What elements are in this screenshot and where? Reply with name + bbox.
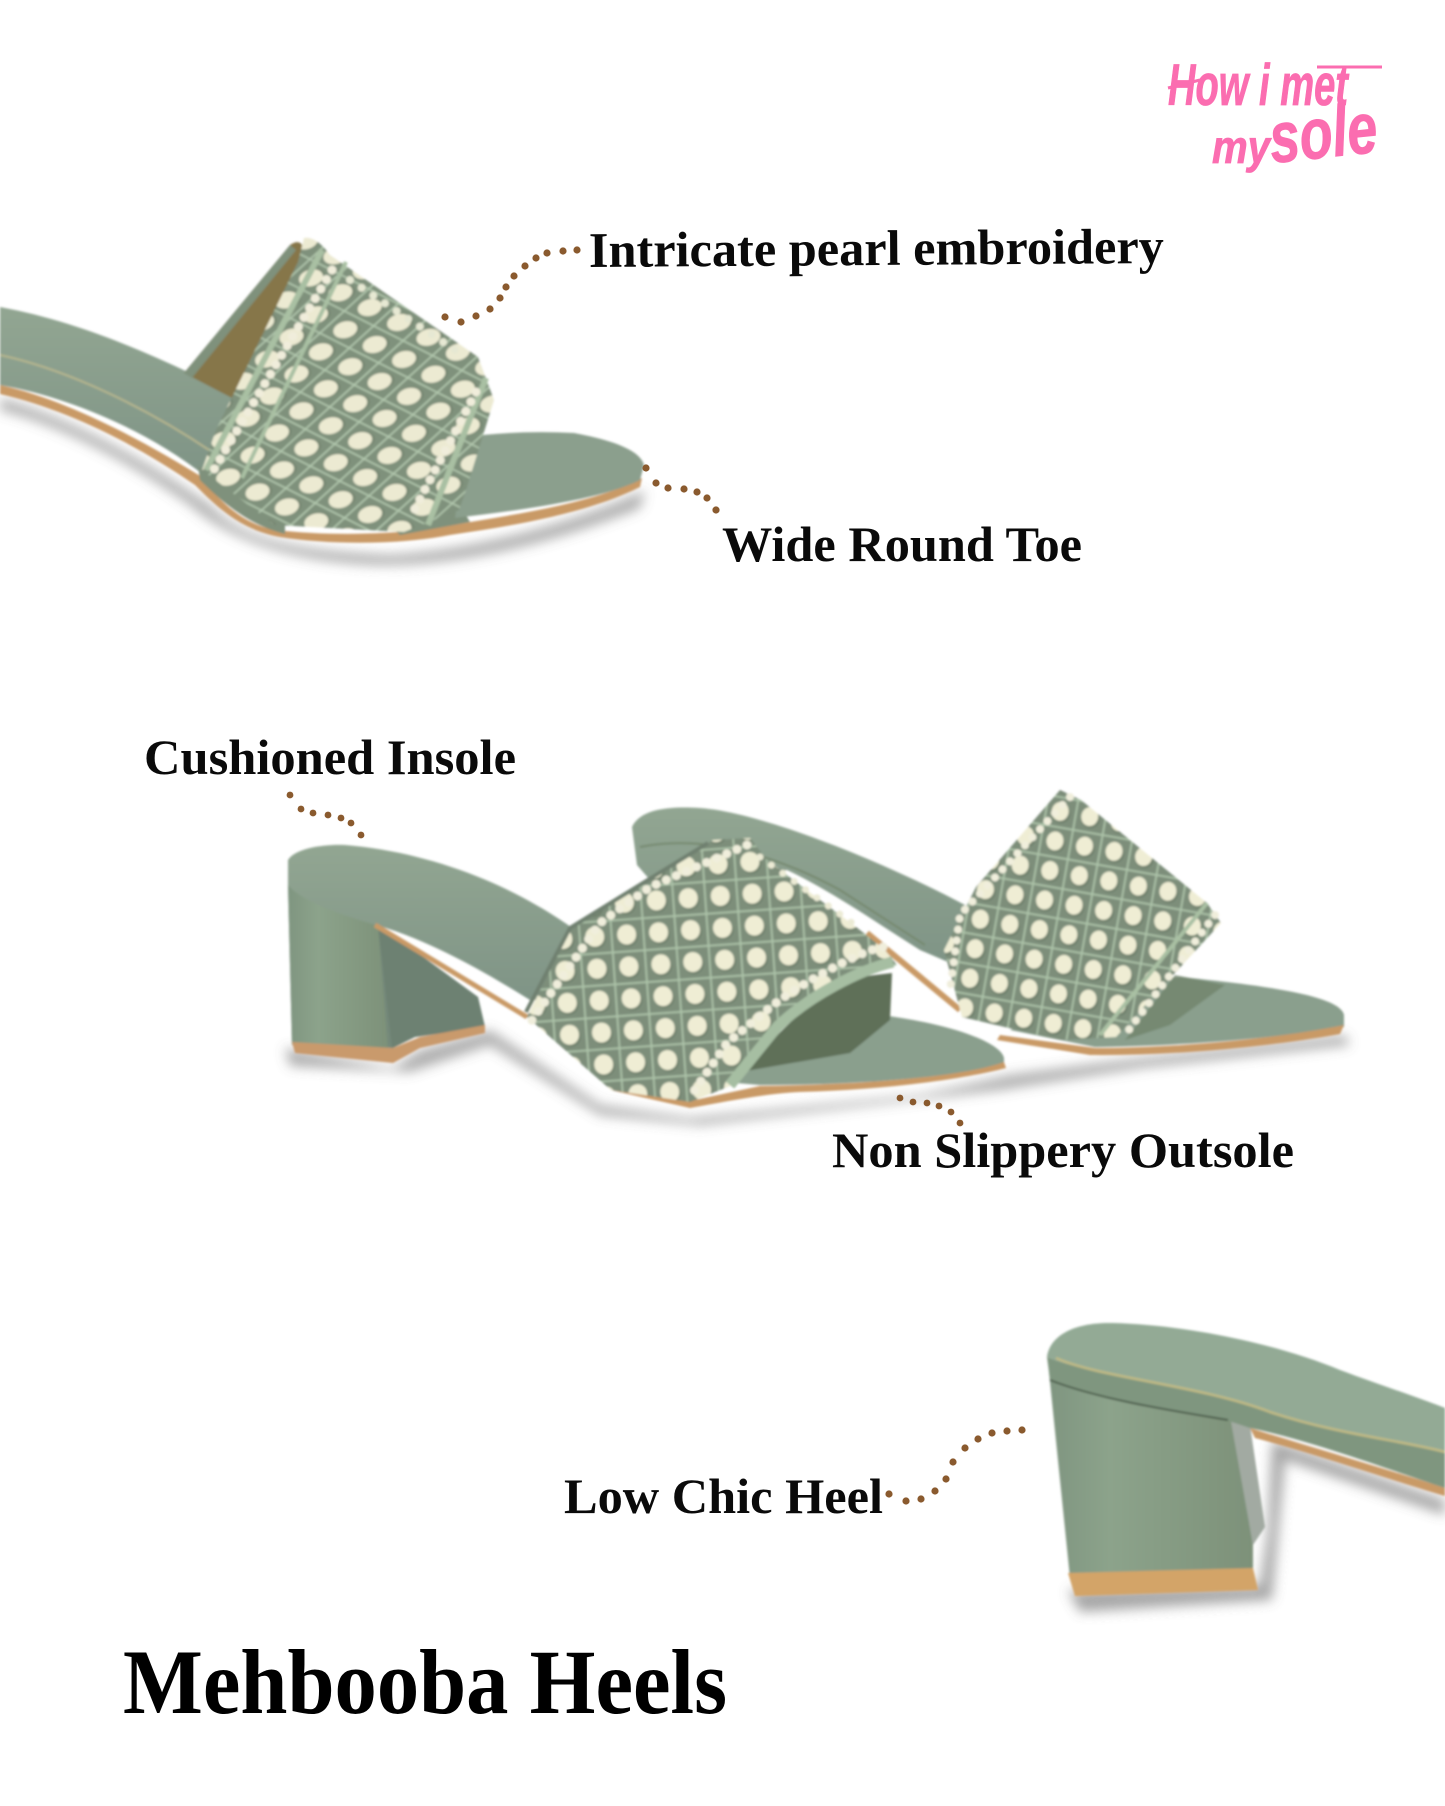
- heel back panel: [1228, 1415, 1265, 1545]
- dotted leader: low chic heel: [885, 1426, 1026, 1505]
- dotted leader: cushioned insole: [287, 792, 364, 838]
- filler under strap: [198, 466, 285, 534]
- tan outsole: [0, 385, 642, 543]
- logo: How i met my sole: my: [1212, 121, 1272, 173]
- heel shadow: [1068, 1440, 1445, 1612]
- strap lining: [184, 242, 304, 398]
- title: Mehbooba Heels: [123, 1631, 727, 1733]
- left shoe: heel tip: [292, 1025, 485, 1063]
- label: low chic heel: Low Chic Heel: [564, 1468, 883, 1524]
- label: cushioned insole: Cushioned Insole: [144, 729, 516, 785]
- shoe shadow: [0, 398, 645, 565]
- left shoe: embroidered strap: [527, 838, 897, 1102]
- toe platform: [455, 432, 644, 518]
- insole top: [1047, 1323, 1445, 1452]
- heel block: [1049, 1372, 1253, 1578]
- tan sole edge: [1250, 1428, 1445, 1496]
- left shoe: insole: [288, 845, 575, 1000]
- dotted leader: non slippery outsole: [897, 1095, 963, 1126]
- dotted leader: pearl embroidery: [441, 246, 581, 326]
- side band: [1047, 1357, 1445, 1488]
- left shoe: toe: [700, 1015, 1004, 1085]
- right shoe: rear insole and band: [632, 808, 965, 965]
- embroidered strap: [202, 238, 494, 532]
- logo: How i met my sole: sole: [1265, 88, 1381, 179]
- shoe: close-up of low heel: [1047, 1323, 1445, 1612]
- label: wide round toe: Wide Round Toe: [722, 516, 1082, 572]
- dotted leader: wide round toe: [642, 464, 720, 514]
- heel tip: [1068, 1568, 1258, 1596]
- shoe: pair of heels: [285, 790, 1350, 1125]
- label: non slippery outsole: Non Slippery Outsole: [832, 1122, 1294, 1178]
- logo: How i met my sole: [1168, 53, 1382, 179]
- shoe: top close-up of embroidered strap: [0, 238, 645, 565]
- logo: How i met my sole: How i met: [1168, 53, 1350, 118]
- rear insole and sole: [0, 307, 250, 476]
- left shoe: heel block: [288, 885, 485, 1048]
- pearl borders: [206, 250, 322, 470]
- right shoe: embroidered strap: [944, 790, 1221, 1040]
- pair shadow: [285, 1030, 1350, 1125]
- left shoe: strap interior: [740, 973, 892, 1072]
- label: intricate pearl embroidery: Intricate pearl embroidery: [589, 218, 1164, 278]
- right shoe: toe: [1010, 977, 1344, 1047]
